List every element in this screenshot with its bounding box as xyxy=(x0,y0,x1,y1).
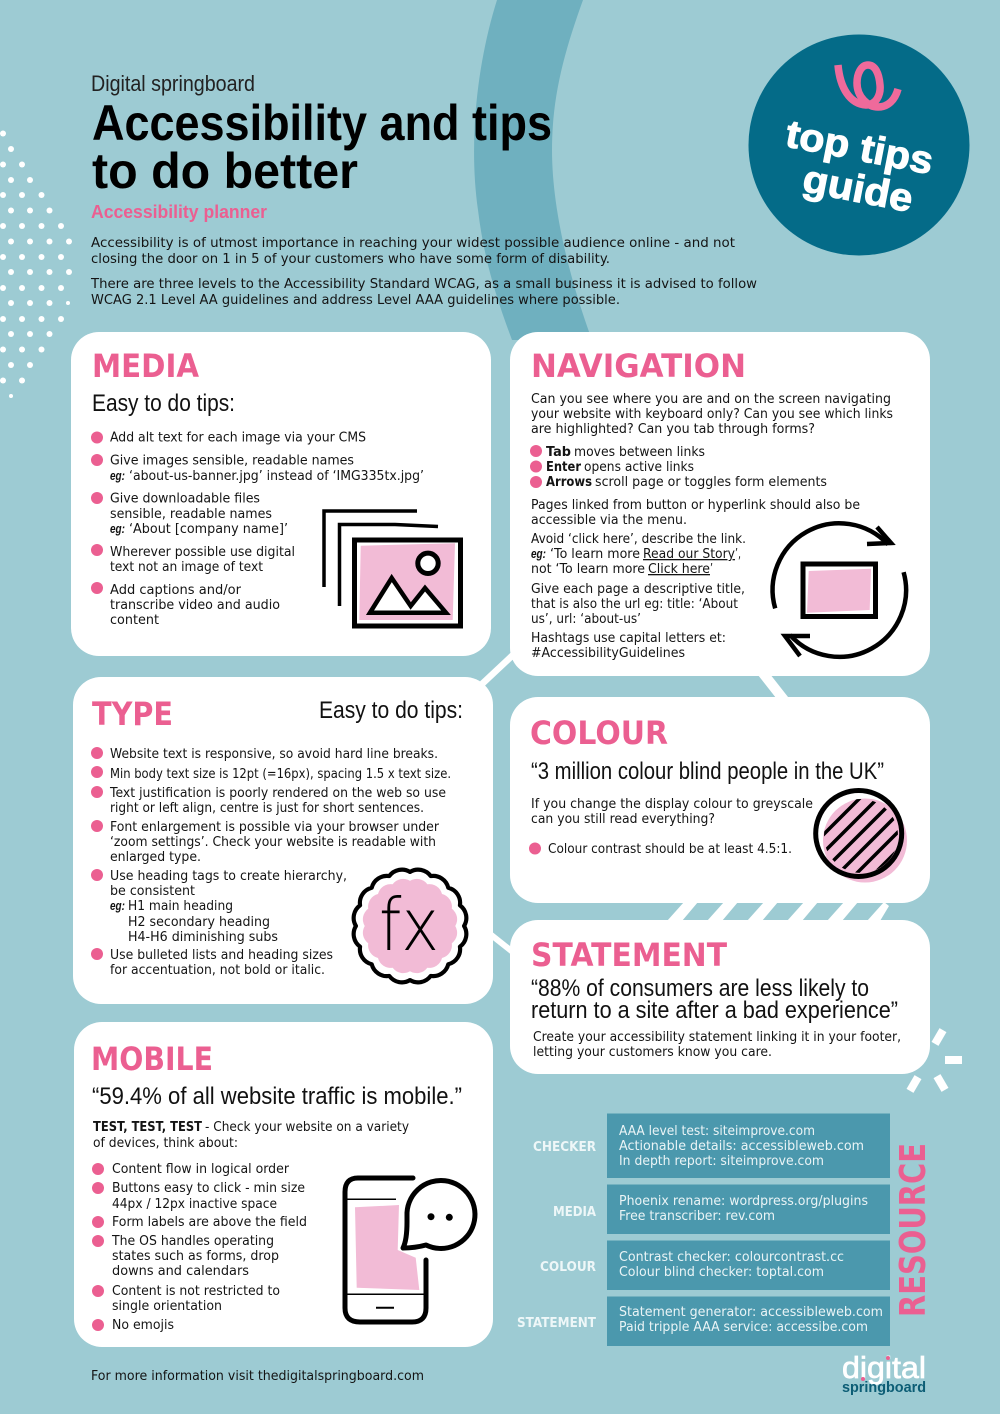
keyboard list: moves between links xyxy=(574,445,705,460)
background dot pattern xyxy=(0,130,72,398)
resource row: checker: Actionable details: accessibleweb.com xyxy=(619,1139,864,1154)
panel: mobile xyxy=(74,1022,493,1347)
header text block xyxy=(90,71,757,308)
panel: statement xyxy=(510,920,930,1074)
navigation intro xyxy=(531,392,893,437)
tips list: eg: xyxy=(110,521,125,536)
tips list: right or left align, centre is just for short sentences. xyxy=(110,801,424,816)
tips list: Wherever possible use digital xyxy=(110,545,295,560)
tips list: be consistent xyxy=(110,884,195,899)
keyboard list: opens active links xyxy=(584,460,694,475)
brand tagline: Digital springboard xyxy=(91,71,255,96)
tips list: Content flow in logical order xyxy=(112,1162,290,1177)
statement body xyxy=(533,1030,901,1060)
footer note: For more information visit thedigitalspringboard.com xyxy=(91,1369,424,1384)
navigation guidance: ‘To learn more xyxy=(550,547,640,562)
heading: mobile: MOBILE xyxy=(91,1040,213,1078)
title: to do better xyxy=(92,143,358,199)
resource row: media: Free transcriber: rev.com xyxy=(619,1209,775,1224)
icon: stacked images xyxy=(324,511,460,626)
tips list: ‘about-us-banner.jpg’ instead of ‘IMG335tx.jpg’ xyxy=(129,469,424,484)
tips list: 44px / 12px inactive space xyxy=(112,1197,277,1212)
tips list xyxy=(91,430,424,628)
navigation guidance: accessible via the menu. xyxy=(531,513,687,528)
resource row: colour: Colour blind checker: toptal.com xyxy=(619,1265,824,1280)
badge text: guide xyxy=(799,158,916,221)
quote: “3 million colour blind people in the UK” xyxy=(531,758,884,785)
resource row: statement xyxy=(517,1296,890,1346)
heading: colour: COLOUR xyxy=(530,714,668,752)
colour body text: can you still read everything? xyxy=(531,812,715,827)
intro paragraphs: WCAG 2.1 Level AA guidelines and address Level AAA guidelines where possible. xyxy=(91,293,620,308)
intro paragraphs: There are three levels to the Accessibility Standard WCAG, as a small business it is advised to follow xyxy=(90,277,757,292)
navigation guidance: that is also the url eg: title: ‘About xyxy=(531,597,738,612)
tips list: Give downloadable files xyxy=(110,492,260,506)
icon: fx badge xyxy=(354,870,466,982)
heading: type: TYPE xyxy=(92,695,173,733)
icon: phone with speech bubble xyxy=(345,1178,475,1322)
navigation intro: are highlighted? Can you tab through forms? xyxy=(531,422,815,437)
intro paragraphs: closing the door on 1 in 5 of your customers who have some form of disability. xyxy=(91,252,610,267)
resource row: colour xyxy=(540,1240,890,1290)
navigation guidance xyxy=(531,498,860,661)
panel: media xyxy=(71,332,491,656)
colour body text: Colour contrast should be at least 4.5:1. xyxy=(548,842,792,857)
tips list: Website text is responsive, so avoid hard line breaks. xyxy=(110,747,438,762)
keyboard list: Enter xyxy=(546,460,582,475)
resource row: checker xyxy=(533,1114,890,1178)
tips list: ‘About [company name]’ xyxy=(129,522,288,537)
logo: digital springboard: springboard xyxy=(842,1379,926,1396)
tips list: content xyxy=(110,613,159,628)
heading: statement: STATEMENT xyxy=(531,936,727,974)
tips list: H1 main heading xyxy=(128,899,233,914)
intro paragraphs xyxy=(90,236,757,308)
tips list: The OS handles operating xyxy=(111,1234,274,1249)
heading: navigation: NAVIGATION xyxy=(531,347,746,385)
tips list: Use heading tags to create hierarchy, xyxy=(110,869,347,884)
resource row: checker: CHECKER xyxy=(533,1140,596,1155)
statement body: letting your customers know you care. xyxy=(533,1045,772,1060)
background curved band xyxy=(474,0,592,340)
statement body: Create your accessibility statement linking it in your footer, xyxy=(533,1030,901,1045)
quote: “88% of consumers are less likely to xyxy=(531,975,869,1002)
colour body text: If you change the display colour to greyscale xyxy=(531,797,813,812)
tips list: states such as forms, drop xyxy=(112,1249,279,1264)
resource row: statement: Statement generator: accessibleweb.com xyxy=(619,1305,883,1320)
keyboard list: scroll page or toggles form elements xyxy=(595,475,827,490)
navigation guidance: not ‘To learn more xyxy=(531,562,645,577)
panel: type xyxy=(73,677,493,1004)
logo: digital springboard: digital xyxy=(842,1350,926,1385)
navigation guidance: Give each page a descriptive title, xyxy=(531,582,745,597)
icon: refresh page xyxy=(773,523,906,657)
tips list xyxy=(91,747,451,978)
tips list: Buttons easy to click - min size xyxy=(112,1181,305,1196)
tips list: ‘zoom settings’. Check your website is readable with xyxy=(110,835,436,850)
tips list: single orientation xyxy=(112,1299,222,1314)
icon: brand loop xyxy=(838,65,898,107)
icon: fx badge: fx xyxy=(379,883,439,967)
quote: “59.4% of all website traffic is mobile.” xyxy=(92,1083,462,1110)
navigation guidance: ’, xyxy=(735,547,741,562)
tips list: Add alt text for each image via your CMS xyxy=(110,430,366,446)
tips list: Text justification is poorly rendered on the web so use xyxy=(109,786,446,801)
tips list: enlarged type. xyxy=(110,850,201,865)
badge text: top tips xyxy=(782,113,937,183)
tips list: Form labels are above the field xyxy=(112,1215,307,1230)
navigation guidance: Read our Story xyxy=(643,547,735,562)
resource section xyxy=(517,1114,934,1346)
tips list: eg: xyxy=(110,468,125,483)
tips list: Min body text size is 12pt (=16px), spacing 1.5 x text size. xyxy=(110,767,451,782)
tips list: Add captions and/or xyxy=(110,583,242,598)
navigation guidance: Hashtags use capital letters et: xyxy=(531,631,726,646)
resource row: statement: Paid tripple AAA service: accessibe.com xyxy=(619,1320,868,1335)
navigation intro: your website with keyboard only? Can you see which links xyxy=(531,407,893,422)
mobile intro: of devices, think about: xyxy=(93,1136,238,1151)
resource row: colour: Contrast checker: colourcontrast.cc xyxy=(619,1250,844,1265)
navigation intro: Can you see where you are and on the screen navigating xyxy=(531,392,891,407)
resource row: statement: STATEMENT xyxy=(517,1316,596,1331)
navigation guidance: ’ xyxy=(710,562,713,577)
navigation guidance: Pages linked from button or hyperlink should also be xyxy=(531,498,860,513)
tips list: transcribe video and audio xyxy=(110,598,280,613)
intro paragraphs: Accessibility is of utmost importance in reaching your widest possible audience online - and not xyxy=(91,236,735,251)
panel: colour xyxy=(510,697,930,903)
resource row: checker: In depth report: siteimprove.com xyxy=(619,1154,824,1169)
colour body text xyxy=(529,797,813,857)
tips list: Use bulleted lists and heading sizes xyxy=(110,948,333,963)
tips list xyxy=(92,1162,307,1333)
tips list: for accentuation, not bold or italic. xyxy=(110,963,325,978)
hatch stripes between colour and statement xyxy=(667,902,889,921)
tips list: H4-H6 diminishing subs xyxy=(128,930,278,945)
navigation guidance: Click here xyxy=(648,562,710,577)
tips list: H2 secondary heading xyxy=(128,915,270,930)
subtitle: Accessibility planner xyxy=(91,202,267,222)
tips list: Font enlargement is possible via your browser under xyxy=(110,820,440,835)
subheading: Easy to do tips: xyxy=(92,390,235,417)
tips list: text not an image of text xyxy=(110,560,263,575)
white connector lines between panels xyxy=(482,654,784,953)
keyboard list: Arrows xyxy=(546,475,592,490)
quote xyxy=(531,975,898,1024)
badge: top tips guide xyxy=(748,34,970,256)
navigation guidance: eg: xyxy=(531,546,546,561)
subheading: Easy to do tips: xyxy=(319,697,463,724)
keyboard list xyxy=(530,445,827,490)
title: Accessibility and tips xyxy=(92,95,552,151)
mobile intro: - Check your website on a variety xyxy=(205,1120,409,1135)
title xyxy=(92,95,552,199)
navigation guidance: #AccessibilityGuidelines xyxy=(531,646,685,661)
icon: striped circle xyxy=(813,788,907,882)
resource row: media: Phoenix rename: wordpress.org/plugins xyxy=(619,1194,868,1209)
tips list: sensible, readable names xyxy=(110,507,272,522)
resource row: media xyxy=(553,1184,890,1234)
tips list: eg: xyxy=(110,898,125,913)
resource vertical heading: RESOURCE xyxy=(893,1143,934,1317)
tips list: No emojis xyxy=(112,1318,174,1333)
keyboard list: Tab xyxy=(546,445,571,460)
heading: media: MEDIA xyxy=(92,347,199,385)
panel: navigation xyxy=(510,332,930,676)
badge text xyxy=(782,113,937,221)
resource row: checker: AAA level test: siteimprove.com xyxy=(619,1124,815,1139)
resource row: media: MEDIA xyxy=(553,1205,596,1220)
mobile intro xyxy=(93,1120,409,1151)
quote: return to a site after a bad experience” xyxy=(531,997,898,1024)
resource row: colour: COLOUR xyxy=(540,1260,596,1275)
navigation guidance: Avoid ‘click here’, describe the link. xyxy=(531,532,746,547)
mobile intro: TEST, TEST, TEST xyxy=(93,1120,202,1135)
decorative burst ticks xyxy=(907,1028,962,1093)
tips list: Give images sensible, readable names xyxy=(110,454,354,468)
tips list: downs and calendars xyxy=(112,1264,249,1279)
navigation guidance: us’, url: ‘about-us’ xyxy=(531,612,641,627)
tips list: Content is not restricted to xyxy=(112,1284,280,1299)
